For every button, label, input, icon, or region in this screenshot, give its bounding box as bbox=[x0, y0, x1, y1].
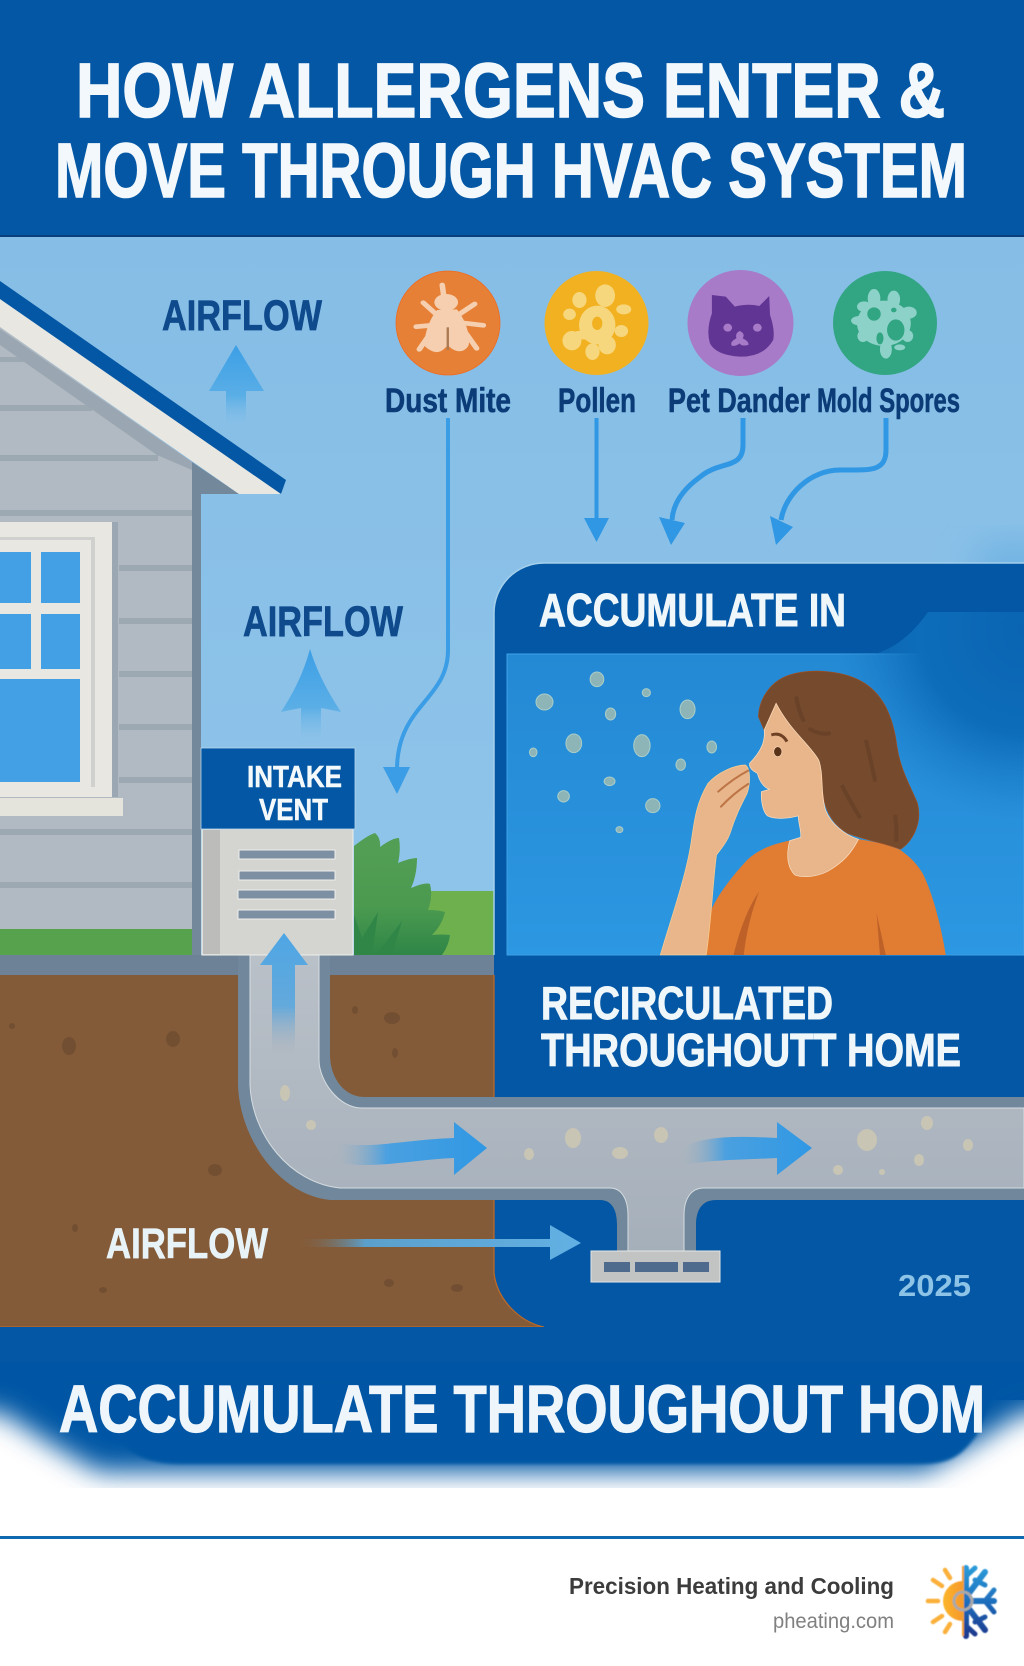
intake vent label: INTAKE bbox=[247, 759, 342, 794]
soil specks bbox=[9, 1006, 463, 1293]
duct arrow 1 bbox=[333, 1122, 487, 1175]
sky background bbox=[0, 236, 1024, 966]
arrow: dust mite bbox=[383, 418, 448, 794]
lawn and bush bbox=[354, 833, 494, 955]
company name: Precision Heating and Cooling bbox=[569, 1573, 894, 1599]
icon: pollen bbox=[544, 271, 648, 375]
panel heading: ACCUMULATE IN bbox=[539, 584, 846, 636]
woman shirt bbox=[706, 839, 946, 955]
window bbox=[0, 522, 123, 816]
roof fascia bbox=[0, 299, 282, 494]
year label: 2025 bbox=[898, 1268, 971, 1303]
house bbox=[0, 281, 286, 955]
allergen labels: Pollen bbox=[558, 382, 636, 420]
icon: sun and snowflake logo bbox=[928, 1566, 994, 1636]
banner body bbox=[50, 1380, 1000, 1464]
bush bbox=[354, 833, 450, 955]
allergen icons bbox=[396, 270, 937, 376]
siding lines bbox=[0, 357, 192, 888]
bottom banner bbox=[0, 1327, 1024, 1488]
allergen labels: Dust Mite bbox=[385, 382, 511, 420]
roof shadow bbox=[0, 329, 192, 470]
allergen labels: Pet Dander bbox=[668, 382, 810, 420]
shirt folds bbox=[734, 892, 886, 955]
arrow: pet dander bbox=[659, 418, 743, 545]
airflow label lower with arrow bbox=[106, 1220, 581, 1268]
intake vent label bbox=[201, 748, 355, 829]
wall corner trim bbox=[192, 462, 239, 955]
window panes bbox=[0, 552, 80, 782]
house lawn strip bbox=[0, 929, 192, 955]
duct interior bbox=[250, 955, 1024, 1252]
vent box bbox=[202, 829, 353, 955]
eye and brow bbox=[774, 747, 782, 757]
header banner bbox=[0, 0, 1024, 237]
woman arm and hand bbox=[660, 765, 750, 955]
floor grille bbox=[591, 1251, 720, 1282]
intake vent bbox=[201, 748, 355, 955]
duct arrow 2 bbox=[679, 1122, 812, 1175]
airflow up arrow top bbox=[209, 345, 264, 430]
icon: pet dander bbox=[688, 270, 794, 376]
airflow arrow lower bbox=[294, 1225, 581, 1260]
panel top-right shading bbox=[853, 612, 1024, 802]
allergen labels: Mold Spores bbox=[817, 382, 960, 420]
airflow label middle: AIRFLOW bbox=[243, 598, 403, 646]
duct particles bbox=[280, 1085, 973, 1175]
arrow: mold spores bbox=[770, 418, 886, 545]
intake vent label: VENT bbox=[259, 792, 328, 827]
airflow up arrow middle bbox=[281, 649, 341, 746]
footer bbox=[0, 1536, 1024, 1636]
roof blue edge bbox=[0, 281, 286, 494]
vent slats bbox=[238, 850, 335, 919]
ground strip bbox=[0, 955, 494, 975]
footer rule bbox=[0, 1536, 1024, 1539]
finger lines bbox=[718, 771, 748, 807]
duct system bbox=[238, 955, 1024, 1282]
airflow label top: AIRFLOW bbox=[162, 292, 322, 340]
icon: mold spores bbox=[833, 271, 937, 375]
woman and allergen particles bbox=[530, 671, 946, 955]
icon: dust mite bbox=[396, 271, 500, 375]
window sill bbox=[0, 798, 123, 816]
airborne particles bbox=[530, 672, 716, 833]
panel bottom heading bbox=[541, 977, 961, 1076]
banner top fill bbox=[0, 1327, 1024, 1362]
banner faded edge bbox=[0, 1362, 1024, 1488]
panel bottom heading: RECIRCULATED bbox=[541, 977, 833, 1029]
information panel bbox=[494, 563, 1024, 1400]
website: pheating.com bbox=[773, 1610, 894, 1633]
woman hair bbox=[758, 671, 919, 849]
panel image area bbox=[507, 654, 1024, 955]
airflow label lower with arrow: AIRFLOW bbox=[106, 1220, 268, 1268]
soil bbox=[0, 975, 544, 1327]
allergen arrows bbox=[383, 418, 886, 794]
allergen labels bbox=[385, 382, 960, 420]
arrow in vertical duct bbox=[260, 933, 308, 1055]
house wall bbox=[0, 327, 192, 929]
arrow: pollen bbox=[584, 418, 609, 542]
woman face and neck bbox=[749, 703, 859, 877]
duct outer wall bbox=[238, 955, 1024, 1252]
